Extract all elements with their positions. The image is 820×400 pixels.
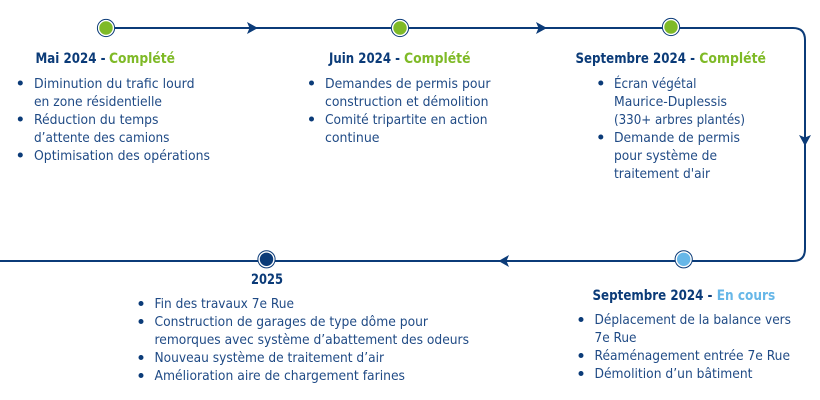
heading: 2025: 2025 [251,271,283,288]
node: juin 2024 [391,19,409,37]
timeline path [0,22,811,267]
list: septembre 2024 en cours: Démolition d’un bâtiment [594,366,752,382]
arrow: top first [247,22,258,34]
heading: juin 2024: Juin 2024 - [328,50,400,67]
heading: septembre 2024 en cours: Septembre 2024 - [592,287,712,304]
node: 2025 [258,251,275,268]
panel: mai 2024 [18,50,210,164]
arrow: right downward [799,135,811,146]
heading: mai 2024 [36,50,175,67]
node: mai 2024 [97,19,115,37]
panel: septembre 2024 complété [576,50,766,182]
list: septembre 2024 complété: Écran végétal [614,74,696,92]
list: mai 2024 [18,77,210,164]
list: 2025: remorques avec système d’abattement des odeurs [154,332,469,348]
list: septembre 2024 en cours: 7e Rue [594,331,636,346]
list: septembre 2024 en cours: Déplacement de la balance vers [594,312,791,328]
list: juin 2024: Demandes de permis pour [325,77,491,92]
list: 2025: Construction de garages de type dôme pour [154,314,428,330]
heading: septembre 2024 complété: Complété [699,50,766,67]
heading: mai 2024: Complété [109,50,175,67]
list: juin 2024 [309,77,491,146]
panel: juin 2024 [309,50,491,146]
list: juin 2024: construction et démolition [325,94,488,110]
list: septembre 2024 complété [598,74,745,182]
list: mai 2024: en zone résidentielle [34,94,162,110]
panel: septembre 2024 en cours [578,287,791,382]
list: 2025: Fin des travaux 7e Rue [154,297,294,312]
arrow: bottom leftward [498,255,509,267]
list: septembre 2024 complété: traitement d'air [614,167,710,182]
list: juin 2024: Comité tripartite en action [325,112,488,128]
list: septembre 2024 complété: Demande de permis [614,131,740,146]
list: septembre 2024 complété: (330+ arbres plantés) [614,112,745,128]
heading: juin 2024: Complété [404,50,471,67]
heading: septembre 2024 en cours: En cours [717,287,775,304]
list: 2025: Amélioration aire de chargement farines [154,368,405,384]
arrow: top second [536,22,547,34]
list: 2025 [138,297,469,384]
node: septembre 2024 complété [662,18,680,36]
list: 2025: Nouveau système de traitement d’air [154,350,384,366]
list: septembre 2024 complété: Maurice-Duplessis [614,95,727,110]
list: mai 2024: Optimisation des opérations [34,148,210,164]
list: mai 2024: d’attente des camions [34,131,170,146]
list: septembre 2024 en cours [578,312,791,382]
list: septembre 2024 complété: pour système de [614,148,717,164]
heading: mai 2024: Mai 2024 - [36,50,106,67]
list: juin 2024: continue [325,131,380,146]
list: mai 2024: Réduction du temps [34,112,159,128]
list: septembre 2024 en cours: Réaménagement entrée 7e Rue [594,348,790,364]
heading: juin 2024 [328,50,471,67]
node: septembre 2024 en cours [675,251,692,268]
list: mai 2024: Diminution du trafic lourd [34,77,194,92]
panel: 2025 [138,271,469,384]
heading: septembre 2024 complété: Septembre 2024 - [576,50,695,67]
